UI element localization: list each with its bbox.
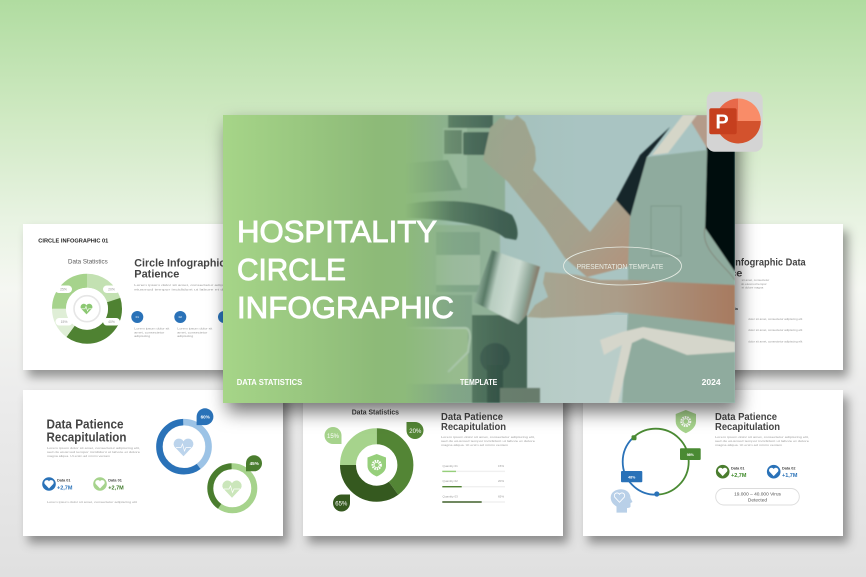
text block: title and description: Lorem ipsum dolor sit amet, consectetur adipiscing elit, <box>715 435 809 439</box>
callout: 65%: 65% <box>335 502 348 508</box>
footer labels: TEMPLATE <box>460 378 498 387</box>
text block: right slide description: dolor sit amet, consectetur adipiscing elit <box>748 328 802 332</box>
text block: title and description: Data Patience <box>441 411 503 423</box>
donut percentage labels: 25% <box>60 288 67 292</box>
text block: right slide description: dolor sit amet, consectetur adipiscing elit <box>748 339 802 343</box>
chart: green ring 45% <box>210 455 262 510</box>
text block: circle infographic title: eiusmod tempor incididunt ut labore et dolore <box>134 288 235 292</box>
footer labels: DATA STATISTICS <box>237 378 303 387</box>
callout: 20%: 20% <box>409 429 422 435</box>
text block: title and description: Data Patience <box>46 416 124 432</box>
pill: virus detected: 19.000 – 40.000 Virus <box>734 492 782 498</box>
coffee machine <box>410 115 541 403</box>
donut percentage labels <box>55 286 120 326</box>
callout: 65% <box>333 494 350 512</box>
text block: circle infographic title: Circle Infographic <box>134 258 225 270</box>
text block: right slide description: et dolore magna <box>742 286 764 290</box>
stat: data 02 blue: Data 02 <box>782 466 796 470</box>
donut chart <box>348 436 405 494</box>
chart: circular progress ring <box>621 429 701 497</box>
numbered steps <box>131 311 230 338</box>
footer labels: 2024 <box>702 378 721 387</box>
chart: circular progress ring: 48% <box>628 476 636 480</box>
stat: data 01 blue: Data 01 <box>57 478 71 482</box>
text block: title and description <box>46 416 140 504</box>
callout: 15% <box>324 427 342 444</box>
panel: data statistics donut slide <box>303 390 563 536</box>
progress bars: Quantity 01 <box>442 464 458 468</box>
icon: heart in donut centre <box>66 288 108 330</box>
chart: green ring 45%: 45% <box>250 461 259 466</box>
donut chart <box>59 281 115 337</box>
progress bars: Quantity 03 <box>442 494 458 498</box>
text block: title and description: Lorem ipsum dolor sit amet, consectetur adipiscing elit, <box>441 435 535 439</box>
icon: PowerPoint logo: P <box>715 112 729 134</box>
stat: data 01 blue <box>42 477 73 491</box>
callout: 15%: 15% <box>327 434 340 440</box>
title <box>237 214 454 325</box>
stat: data 01 green: Data 01 <box>731 466 745 470</box>
photo: barista with milk pitcher <box>223 115 735 403</box>
text block: right slide description: do eiusmod tempor <box>741 282 767 286</box>
donut percentage labels: 15% <box>61 320 67 324</box>
person: black shirt <box>616 127 670 218</box>
title: CIRCLE <box>237 252 346 287</box>
icon: PowerPoint logo <box>707 92 763 152</box>
text block: right slide title: Patience <box>697 268 742 280</box>
person: raised arm and hand <box>483 115 632 277</box>
text block: right slide description <box>729 278 802 343</box>
slide heading: CIRCLE INFOGRAPHIC 01 <box>38 238 108 244</box>
stat: data 01 green <box>93 477 124 491</box>
donut percentage labels: 40% <box>108 320 115 324</box>
panel: circle process slide <box>583 390 843 536</box>
text block: right slide description: Data <box>729 306 739 311</box>
text block: title and description: Lorem ipsum dolor sit amet, consectetur adipiscing elit, <box>47 446 140 450</box>
stat: data 02 blue: +1,7M <box>782 473 798 479</box>
text block: title and description: sed do eiusmod tempor incididunt ut labore et dolore <box>715 439 809 443</box>
chart: blue ring 60% <box>159 408 213 471</box>
stat: data 01 green: +2,7M <box>108 485 124 491</box>
numbered steps: adipiscing <box>134 334 151 338</box>
text block: circle infographic title: Patience <box>134 269 179 281</box>
stat: data 01 green <box>716 465 747 479</box>
text block: right slide description: sit amet, consectetur <box>742 278 769 282</box>
progress bars <box>442 464 505 503</box>
callout: 20% <box>406 422 424 439</box>
text block: right slide title <box>697 256 806 280</box>
numbered steps: 02 <box>179 315 182 319</box>
oval tag: presentation template: PRESENTATION TEMPLATE <box>577 262 663 271</box>
text block: circle infographic title: Lorem ipsum dolor sit amet, consectetur adipiscing <box>134 283 235 287</box>
text block: right slide description: dolor sit amet, consectetur adipiscing elit <box>748 317 802 321</box>
person: neck and strap <box>691 115 708 150</box>
text block: circle infographic title <box>134 258 235 292</box>
numbered steps: Lorem ipsum dolor sit <box>134 326 169 330</box>
title: HOSPITALITY <box>237 214 437 249</box>
panel: hero cover slide <box>223 115 735 403</box>
text block: title and description: magna aliqua. Ut enim ad minim veniam <box>441 443 509 447</box>
text block: title and description: sed do eiusmod tempor incididunt ut labore et dolore <box>47 450 140 454</box>
text block: right slide title: Infographic Data <box>733 256 806 268</box>
donut heading: Data Statistics <box>68 260 108 266</box>
panel: infographic data slide <box>690 224 843 370</box>
stat: data 01 green: +2,7M <box>731 473 747 479</box>
icon: head with heart <box>611 489 632 513</box>
progress bars: 65% <box>498 494 504 498</box>
numbered steps: 01 <box>136 315 139 319</box>
title: INFOGRAPHIC <box>237 290 454 325</box>
person: apron <box>622 150 735 403</box>
text block: title and description <box>715 411 809 447</box>
apron ties <box>600 327 735 403</box>
icon: green shield gear <box>676 410 696 433</box>
panel: circle infographic 01 slide <box>23 224 283 370</box>
oval tag: presentation template <box>564 247 682 285</box>
progress bars: Quantity 02 <box>442 479 458 483</box>
text block: title and description: Recapitulation <box>46 430 127 444</box>
text block: title and description: Recapitulation <box>715 421 780 433</box>
stat: data 02 blue <box>767 465 798 479</box>
progress bars: 15% <box>498 464 504 468</box>
text block: title and description: Data Patience <box>715 411 777 423</box>
person: lower arm and hand <box>527 272 735 325</box>
numbered steps: amet, consectetur <box>134 330 164 334</box>
footer labels <box>237 378 721 387</box>
progress bars: 20% <box>498 479 504 483</box>
text block: title and description: magna aliqua. Ut enim ad minim veniam <box>715 443 783 447</box>
pill: virus detected: Detected <box>748 498 767 504</box>
icon: shield gear <box>368 454 386 476</box>
chart: circular progress ring: 98% <box>687 453 695 457</box>
stat: data 01 green: Data 01 <box>108 478 122 482</box>
text block: title and description: magna aliqua. Ut enim ad minim veniam <box>47 454 111 458</box>
text block: title and description: Recapitulation <box>441 421 506 433</box>
gradient overlay <box>223 115 516 403</box>
text block: title and description: sed do eiusmod tempor incididunt ut labore et dolore <box>441 439 535 443</box>
numbered steps: amet, consectetur <box>177 330 207 334</box>
stat: data 01 blue: +2,7M <box>57 485 73 491</box>
donut heading: Data Statistics <box>352 410 399 416</box>
blurred photo contents <box>380 115 735 403</box>
donut percentage labels: 20% <box>108 288 115 292</box>
text block: title and description: Lorem ipsum dolor sit amet, consectetur adipiscing elit <box>47 500 137 504</box>
panel: data patience recapitulation slide with two rings <box>23 390 283 536</box>
numbered steps: Lorem ipsum dolor sit <box>177 326 212 330</box>
metal pitcher <box>473 250 540 324</box>
numbered steps: adipiscing <box>177 334 194 338</box>
text block: title and description <box>441 411 535 447</box>
pill: virus detected <box>716 488 799 505</box>
chart: blue ring 60%: 60% <box>201 414 210 420</box>
